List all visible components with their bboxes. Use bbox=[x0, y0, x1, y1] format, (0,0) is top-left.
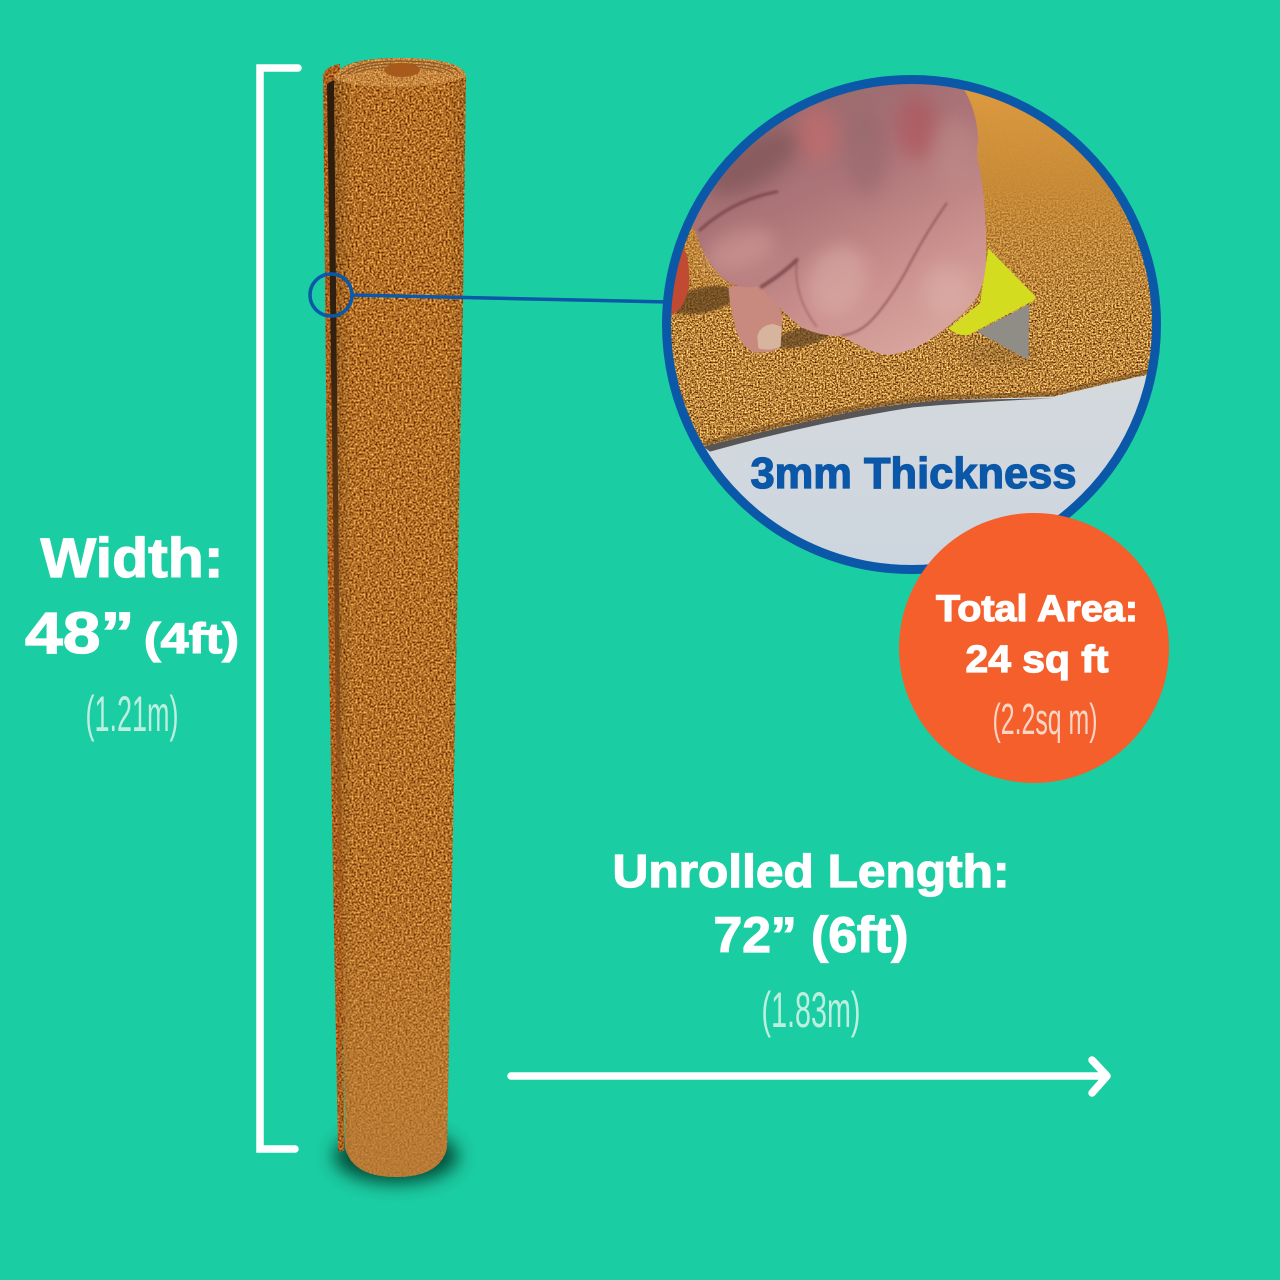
width metric: (1.21m) bbox=[86, 686, 178, 742]
width inches: 48” (4ft) bbox=[25, 601, 239, 666]
length label bbox=[612, 845, 1010, 1038]
cork sheet bbox=[671, 160, 1152, 446]
thickness label: 3mm Thickness bbox=[750, 449, 1076, 498]
knife blade bbox=[977, 304, 1029, 360]
smooth out-of-focus cork bbox=[684, 90, 1151, 314]
length metric: (1.83m) bbox=[762, 982, 860, 1038]
other finger at edge bbox=[671, 247, 689, 315]
roll top end bbox=[334, 58, 466, 87]
length inches: 72” (6ft) bbox=[714, 907, 908, 963]
knife handle bbox=[948, 248, 1036, 335]
length arrow bbox=[511, 1060, 1107, 1093]
area heading: Total Area: bbox=[936, 588, 1138, 629]
outer flap bbox=[323, 64, 344, 1152]
roll shadow bbox=[334, 1129, 458, 1183]
lens ring bbox=[666, 80, 1156, 570]
area metric: (2.2sq m) bbox=[992, 695, 1098, 744]
area value: 24 sq ft bbox=[966, 639, 1109, 681]
total area badge bbox=[899, 513, 1169, 783]
sheet cut edge bbox=[703, 372, 1147, 444]
index finger bbox=[728, 283, 783, 353]
skin shading bbox=[699, 95, 973, 325]
roll core hole bbox=[384, 63, 420, 77]
width label bbox=[25, 526, 239, 742]
width heading: Width: bbox=[40, 526, 224, 589]
fist bbox=[680, 80, 986, 355]
shadow behind fingers bbox=[675, 284, 730, 316]
finger creases bbox=[700, 192, 947, 336]
detail photo lens bbox=[660, 70, 1170, 580]
width bracket bbox=[260, 68, 298, 1149]
dark seam bbox=[327, 80, 343, 1000]
cork roll bbox=[323, 58, 466, 1183]
photo content bbox=[671, 84, 1152, 565]
badge circle bbox=[899, 513, 1169, 783]
zoom marker circle and connector bbox=[310, 274, 668, 316]
length heading: Unrolled Length: bbox=[612, 845, 1010, 897]
infographic canvas bbox=[25, 58, 1169, 1198]
roll body bbox=[334, 58, 466, 1177]
cork shadow on the floor bbox=[703, 398, 1053, 452]
